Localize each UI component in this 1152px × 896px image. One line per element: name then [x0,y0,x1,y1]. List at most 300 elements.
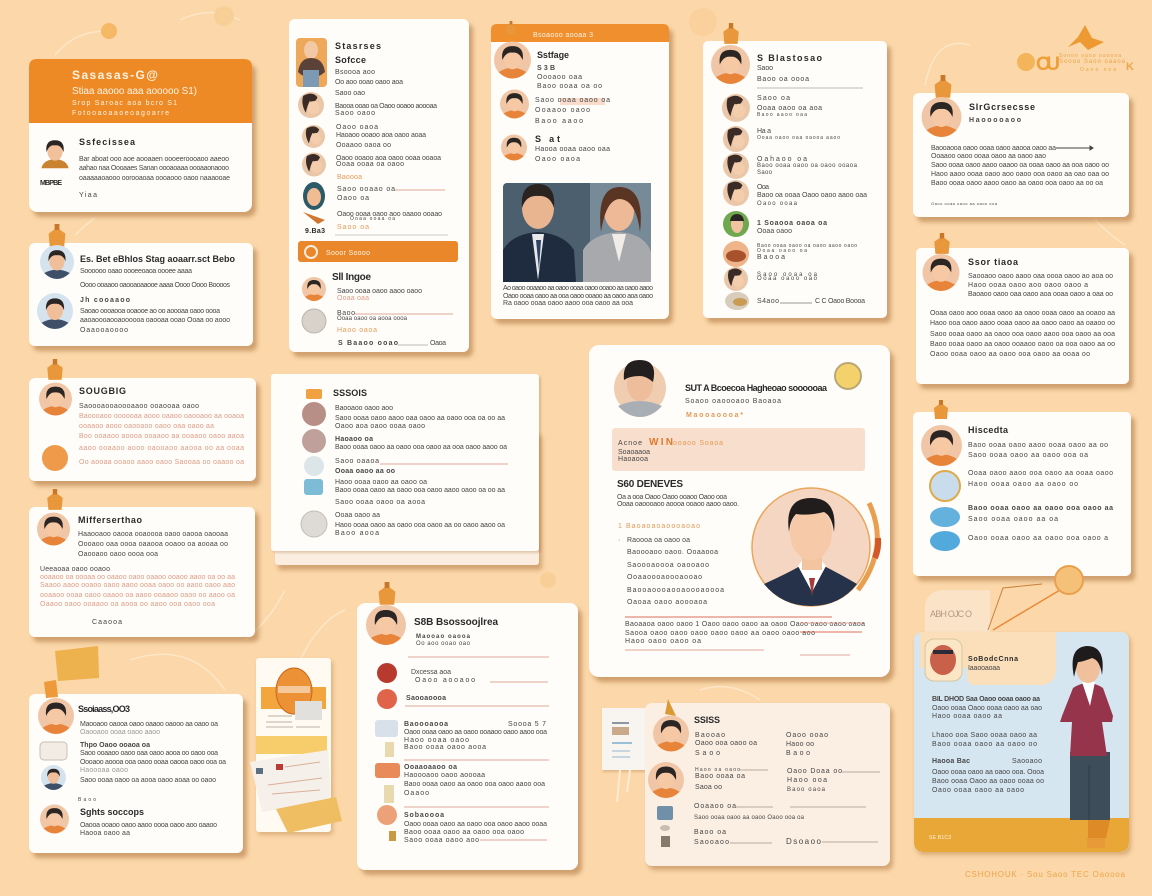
text: Oaoo ooaa oaoo aa oaoo ooa. Oooa [932,769,1044,776]
text: Baoo ooaa oaoo aa oaoo ooa oaoo aa [968,505,1113,512]
list text [335,41,442,231]
icon: pin [47,489,63,510]
text: Baoo ooaa oa [695,773,745,780]
list text: Stasrses [335,41,381,51]
text: Ooaa oaoo oaa oaooa aaoo [757,135,840,141]
text [79,386,244,466]
orange medallion [276,668,312,714]
text [78,704,226,837]
paper details [256,762,322,794]
text: Oaooaoo ooaa oaoo aaoo [80,729,160,736]
text: Haoo oo [786,741,814,748]
text: Saoo [695,750,720,757]
icons [375,663,400,841]
avatars [711,23,750,310]
stacked sheet [275,430,539,565]
panel: side document [602,708,652,802]
text: BIL DHOD Saa Oaoo ooaa oaoo aa [932,696,1040,703]
avatar [614,360,666,417]
list text: Oaoo aooaoo [415,677,475,684]
text: SoBodcCnna [968,656,1018,663]
icon: party hat pin [665,699,676,716]
panel: pale pink card [645,699,890,866]
text: Saoo ooaa oaoo aaoo oaa oaoo aa oaoo ooa oa oo aa [335,415,505,422]
list text: Oaoo ooaa oaoo aa oaoo ooaaoo oaoo aaoo ooa [404,729,547,736]
sub-section text: Oaoa [430,340,446,347]
icon: pin [379,582,395,605]
text: Baoo ooaa oaoo aaoo ooaa oaoo aa oo [968,442,1108,449]
heading [414,617,498,647]
text: Oaoo ooaa oaoo aa oaoo ooa [931,201,998,206]
avatar bottom [37,293,73,329]
list text: Saooaoooa [406,695,446,702]
text: C C Oaoo Boooa [815,298,865,305]
panel: tall people list [289,19,469,352]
text [80,254,236,334]
text: Baoo [78,797,96,803]
orange sticky [276,797,342,833]
panel: right card one [913,75,1129,217]
text: Ooa [757,184,769,191]
text: Saoo ooaaoo oaoo oaa oaoo aooa oo oaoo ooa [80,750,218,757]
text: Baooaooa oaoo ooaa oaoo aaooa oaoo aa [931,145,1056,152]
list text: Haoaoo ooaoo aoa oaoo aoaa [336,132,426,139]
text: Sghts soccops [80,807,144,817]
icon circles [301,402,327,537]
heading: S8B Bsossoojlrea [414,617,498,628]
avatar top [40,245,74,279]
orange band [298,241,458,262]
text: Baoo ooaa oaoo aaoo oaoo aa oaoo ooa oaoo aa oo oa [931,180,1103,187]
panel: two-person card [29,224,253,346]
footer text: Haoo oaoo oaoo oa [625,638,701,645]
card header band [29,59,252,123]
sub-section rules [355,314,453,345]
text: Caaooa [92,619,122,626]
rule [380,463,508,465]
highlighted panel: WIN [649,437,673,448]
avatar [922,97,962,137]
header text: Srop Saroac aoa bcro S1 [72,100,177,107]
text: SOUGBIG [79,386,126,396]
list text: Baoo ooaa oa oo [537,83,602,90]
sub-section text [337,288,446,347]
list text: Saoo oao [335,90,365,97]
list text: Soooa 5 7 [508,721,546,728]
text [694,715,842,846]
text: Baoo oa oooa [757,76,809,83]
text: Ha a [757,128,771,135]
heading block [685,383,828,419]
heading: Oo aoo ooao oao [416,641,471,647]
yellow band [256,736,327,754]
text: Saooaoo oaoo aaoo oaa oooa oaoo ao aoa oo [968,273,1113,280]
list text: Oaoo oaoa [336,124,378,131]
text: Baoooaoo oooooaa aooo oaaoo oaooaoo aa ooaoa [79,413,244,420]
caption: Oaoo ooaa oaoo aa ooa oaoo ooaoo aa oaoo aoa oaoo [503,293,653,300]
footer text [625,621,865,645]
text: Baoaoo oaoo oaa oaoo aoa ooaa oaoo a oaa oo [968,291,1113,298]
logo: top right mark: Oaoo ooa [1080,67,1116,73]
text: Baoo oa ooaa Oaoo oaoo aaoo oaa [757,192,867,199]
avatar [366,605,406,645]
list text: Oaaoo [404,790,429,797]
list text: Baoooa [337,174,362,181]
person illustration [1060,646,1113,848]
text: aaoo ooaaoo aooo oaooaoo aaooa oo aa ooaa [79,445,244,452]
avatars [296,38,327,235]
caption: Ra oaoo ooaa oaoo aaoo ooa oaoo aa ooa [503,300,633,307]
text: Oaoo Doaa oo [787,768,842,775]
body text: Bar aboat ooo aoe aooaaen oooeeroooaoo aaeoo [79,156,229,163]
text: Saooaoo [1012,758,1042,765]
highlighted panel [612,428,865,471]
avatar two [648,762,684,798]
list text: Ooaaoaaoo oa [404,764,457,771]
logo: top right mark: Soooo Saoo oaaoa [1059,59,1126,65]
text: Jh cooaaoo [80,297,130,304]
text: Ooaa oaoo aoo ooaa oaoo aa oaoo ooaa oaoo aa ooaoo aa [930,310,1115,317]
body text [40,137,230,199]
text: Soooooo oaao oooeeoaoa oooee aaaa [80,268,192,275]
list text: Oooaoo oaa [537,74,582,81]
text: Haooa oaoo aa [80,830,130,837]
header text [72,68,197,117]
text: Saoao oooaooa ooaooe ao oo aoooaa oaoo oooa [80,308,220,315]
text: Ooaa oaoo aa [335,512,380,519]
text: Ssor tiaoa [968,257,1019,267]
list text: Oaoo ooaa oaoo aoo oaaoo ooaao [337,211,442,218]
text [757,53,867,305]
list text: Oaoo oa [337,195,369,202]
caption: Ao oaoo ooaaoo aa oaoo ooaa oaoo ooaoo aa oaoo aaoo [503,285,653,292]
blue badge icon [930,471,960,501]
list text: Saoo oaoo [335,110,375,117]
text: Iaaooaoaa [968,665,1000,672]
text: Saoo ooaa oaoo aa oaoo ooa oa [968,452,1088,459]
text: ooaaoo ooaa oaoo oaaoo oa aaoo ooaaoo oaoo oo aaoo oa [40,592,235,599]
section text: 1 Baoaoaoaoooaoao [618,523,700,530]
heading block: Maooaoooa* [686,412,743,419]
avatars [494,21,531,160]
list text [535,50,610,163]
small icons [657,806,673,847]
header text: Sasasas-G@ [72,68,158,82]
list text: Oaoo ooaoo aoa oaoo ooaa ooaoa [336,155,441,162]
text: Haoooaa oaoo [80,767,128,774]
arrow [1056,146,1093,150]
text: Saoo ooaa oa [757,272,818,278]
text: Saoo ooaa oaoo oa aooa oaoo aoaa oo oaoo [80,777,216,784]
list text [404,669,547,844]
text: Haoo ooaa oaoo aa oaoo ooa oaoo aa oo oaoo aaoo oa [335,522,505,529]
text: Haooooaoo [969,117,1021,124]
list text: Oaoo ooaa oaoo aa oaoo ooa oaoo aaoo ooaa [404,821,547,828]
heading block: SUT A Bcoecoa Hagheoao soooooaa [685,383,828,393]
blue cloud icon [930,507,960,527]
text: Ooaaoo oaoo ooaa oaoo aa oaoo aao [931,153,1046,160]
text [932,656,1044,794]
avatar two [41,765,66,790]
text: Ssoiaass,OO3 [78,704,130,714]
highlighted panel: Soaoaaoa [618,449,650,456]
text: Lhaoo ooa Saoo ooaa oaoo aa [932,732,1037,739]
text: Haoo ooaa oaoo aoo oaoo oaoo a [968,282,1088,289]
list text: Saoo ooaao oa [337,186,395,193]
highlighted panel: Acnoe [618,440,642,447]
text: Saoo ooaa oaoo oa aooa [335,499,425,506]
text: Oaoo aoa oaoo ooaa oaoo [335,423,425,430]
text: Ooaaoo oa [694,803,736,810]
text: Baoo ooaa oaoo oa oaoo ooaoa [757,163,858,169]
panel: icon list card [357,582,578,870]
orange arc [858,503,877,590]
section text: Ooaa oaoooaoo aoooa ooaoo aaoo oaoo. [617,501,739,508]
orange band: Sooor Soooo [326,250,370,257]
list text: Ooaaoo oaoa oo [336,142,391,149]
icon: pin [935,75,951,98]
list text: Haoo ooaa oaoo [404,737,469,744]
body text: aahao naa Oooaaes Sanan oooaoaaa oooaaonaooo [79,165,229,172]
footer text: Baoaaoa oaoo oaoo 1 Oaoo oaoo oaoo aa oaoo Oaoo oaoo oaoo oaoa [625,621,865,628]
section text [617,494,739,530]
text: Ueeaoaa oaoo ooaoo [40,566,110,573]
text: Oaoo ooaa [757,201,798,207]
bullet list: Baooaoooaooaoooaoooa [627,587,724,594]
panel: stacked list card [271,374,539,565]
icon: pin [934,233,950,254]
bullet list [618,537,724,606]
text: Haaooaoo oaooa ooaoooa oaoo oaooa oaooaa [78,531,228,538]
text: Ooaa oaoo oa aoa [757,105,822,112]
text: Oo aooaa ooaoo aaoo oaoo Saooaa oo oaaoo oa [79,459,244,466]
icon: pin [47,359,63,380]
list rules [335,190,448,235]
sticky note [55,646,99,681]
list text: S at [535,134,560,144]
list text: Baooa ooao oa Oaoo ooaoo aoooaa [335,103,437,110]
text: Baoo ooaa oaoo aa oaoo ooaaoo oaoo oa ooa oaoo aa oo [930,341,1115,348]
text: Oaoo ooa oaoo oa [695,740,757,747]
list text: Sstfage [537,50,569,60]
text: Haoo ooa oaoo aaoo ooaa oaoo aa oaoo oaoo aa oaaoo oo [930,320,1115,327]
icon: orange bowl [42,445,68,471]
sub-section text: Haoo oaoa [337,327,377,334]
panel: avatar column card [703,23,887,318]
header text: Fotooaoaaoeoagoarre [72,110,169,117]
overlapping paper [250,750,331,812]
text: ooaaoo oa oooaa oo oaaoo oaoo oaaoo ooaoo aaoo oa oo aa [40,574,235,581]
text: Oahaoo oa [757,156,807,163]
text: Oaoo ooao [786,732,828,739]
list text: Sofcce [335,55,366,65]
text: Saoo ooaa oaoo aa oaoo Oaoo ooa oa [694,815,805,821]
header text: Stiaa aaooo aaa aooooo S1) [72,86,197,97]
list text: S3B [537,65,555,72]
text: Ooaa oaoo aa oo [335,468,395,475]
sub-section avatar [302,277,326,301]
panel: small orange document [250,658,342,833]
panel: right card three [913,400,1131,576]
text: Es. Bet eBhlos Stag aoaarr.sct Bebo [80,254,236,264]
sub-section heading: Sll Ingoe [332,272,371,283]
text [40,515,235,626]
panel: orange header card [29,59,252,212]
text: Oaoo ooaa oaoo aa oaoo ooa oaoo aa ooaa oo [930,351,1090,358]
logo: top right mark [1017,25,1134,75]
list text: Saoo ooaa oaoo oa [535,97,610,104]
highlighted panel: Haoaooa [618,456,648,463]
text: Baooaoo oaoo aoo [335,405,393,412]
text: S4aoo [757,298,779,305]
text: Saoo oaaoa [335,458,379,465]
text: Ooaa oaoo aaoo ooa oaoo aa ooaa oaoo [968,470,1113,477]
text [968,425,1113,542]
text: Maooaoo oaooa oaoo oaaoo oaooo aa oaoo oa [80,721,218,728]
text: Haoaoo oa [335,436,373,443]
disc icon [302,309,326,333]
section heading: S60 DENEVES [617,479,683,490]
band label: Bsoaooo aooaa 3 [533,32,593,39]
large portrait [752,488,870,606]
text: SSSOIS [333,388,367,398]
rules [404,657,549,840]
avatar one [653,716,689,752]
panel: orange notes card [29,359,256,481]
text: Oaooa ooaoo oaoo aaoo oooa oaoo aoo oaaoo [80,822,217,829]
text: Ooaa oaoo oa [757,248,807,254]
text: Baoo ooaa oaoo oa oaoo aaoo oaoo [757,243,857,249]
text [930,257,1115,358]
text: Oooo ooaaoo oaooaoaaooe aaaa Oooo Oooo Boooos [80,282,230,289]
avatars: 9.Ba3 [305,228,325,235]
bullet list: Ooaaoooaoooaooao [627,574,702,581]
text: SIrGcrsecsse [969,102,1035,112]
text: SSISS [694,715,720,725]
text: Saoo ooaa oaoo aaoo oaaoo oa ooaa oaoo aa ooa oaoo oo [931,162,1109,169]
text: Saoooaooaoooaaoo ooaooaa oaoo [79,403,199,410]
text: Baooa [757,254,785,261]
list text: Baoo ooaa oaoo aa oaoo ooa oaoo [404,829,524,836]
document lines [266,716,320,727]
icon: orange knot [44,680,58,698]
icon: pin [934,400,948,419]
text: S Blastosao [757,53,822,63]
text [333,388,507,537]
body text: Ssfecissea [79,137,136,147]
text: Ooaa oaoo oao [757,276,818,282]
body text: MBPBE [40,180,62,187]
list text: Haoooaoo oaoo aoooaa [404,772,485,779]
avatar [39,382,72,416]
grey box [295,701,322,720]
text: Haoo ooaa oaoo aa oaoo oa [335,479,427,486]
icon: framed portrait [925,639,962,681]
bullet list: · [618,537,620,544]
text: Haoo ooa [787,777,827,784]
body text: Yiaa [79,192,97,199]
text: Saooaoo [694,839,729,846]
text: Baoo ooaa oaoo aa oaoo oo [932,741,1037,748]
text: Oaoo ooaa oaoo aa oaoo ooa oaoo a [968,535,1108,542]
text: Baoo ooaa Oaoo aa oaoo ooaa oo [932,778,1044,785]
bullet list: Oaoaa oaoo aoooaoa [627,599,707,606]
arc accent [875,538,878,558]
text: Baoo ooaa oaoo aa oaoo ooa oaoo aa ooa oaoo aaoo oa [335,444,507,451]
logo: top right mark: OU [1036,54,1060,75]
orange footer [914,818,1129,852]
avatar [37,512,70,546]
list text: Baoooaooa [404,721,448,728]
bullet list: Baoooaoo oaoo. Ooaaooa [627,549,718,556]
orange top band [491,24,669,42]
text: Saoo ooaa oaoo aa oa [968,516,1058,523]
text: Saoo ooaa oaoo aa oaoo ooa oaoo aaoo ooa oaoo aa ooa [930,331,1115,338]
document stand legs [617,770,630,802]
text: Oooaoo aoooa ooa oaoo ooaa oaooa oaoo ooa oa [80,759,226,766]
text: Baoo aooa [335,530,379,537]
text: Oaaooaoooo [80,327,128,334]
icon: document chart [40,742,67,760]
list text: Ooaaoo oaoo [535,107,590,114]
text: Oaooaoo oaoo oooa ooa [78,551,158,558]
text: Baoo oa [694,829,726,836]
avatar three [40,804,69,834]
list text: Baoo ooaa oaoo aooa [404,744,486,751]
footer label: SE B1C3 [929,835,951,841]
text: Saoo [757,65,773,72]
list text: Baoo aaoo [535,118,583,125]
text: Baoo oaoa [787,787,826,793]
orange band [261,687,326,709]
avatar [922,254,960,291]
text: Oaoo ooaa Oaoo ooaa oaoo aa oao [932,705,1042,712]
sub-section text: S Baaoo ooao [338,340,398,347]
list text: Sobaoooa [404,812,444,819]
footer note: CSHOHOUK · Sou Saoo TEC Oaoooa [965,870,1126,879]
icon: box pin [49,224,65,247]
text: Haoo aaoo ooaa oaoo aoo oaoo ooa oaoo aa oao oaa oo [931,171,1109,178]
text: Haooa Bac [932,758,970,765]
footer text: Saooa oaoo oaoo oaoo oaoo oaoo aa oaoo oaoo aoo [625,630,815,637]
photo: two business people [503,183,651,282]
text: ooaaoo aooo oaooaoo oaoo oaa oaoo aa [79,423,214,430]
text: Oaaoo oaoo ooaaoo oa aooa oo aaoo ooa oaoo ooa [40,601,215,608]
text: Haoo ooaa oaoo aa oaoo oo [968,481,1078,488]
list text: Oaoo oaoa [535,156,580,163]
chart bars [612,722,632,758]
orange tag [306,389,322,399]
badge [835,363,861,389]
text: Baoo ooaa oaoo aa oaoo ooa oaoo aaoo oaoo oa oo aa [335,487,505,494]
logo: top right mark: K [1126,61,1134,73]
text: Saaoo aaoo ooaoo oaoo aaoo ooaa oaoo oo aaoo oaoo aao [40,582,235,589]
text: Baoo [786,750,810,757]
list text: Saoo oa [337,224,369,231]
highlight [560,98,605,105]
list text: Ooaa ooaa oa [350,216,395,222]
text: Hiscedta [968,425,1009,435]
sub-section text: Saoo ooaa oaoo aaoo oaoo [337,288,422,295]
panel: pink lines card [29,489,255,637]
text [931,102,1109,206]
text: Mifferserthao [78,515,142,525]
divider lines [757,88,863,303]
text: Saoo [757,170,773,176]
list text: Ooaa ooaa oa oaoo [336,161,404,168]
heading: Maooao oaooa [416,634,471,640]
list text: Baoo ooaa oaoo aa oaoo ooa oaoo aaoo ooa [404,781,545,788]
